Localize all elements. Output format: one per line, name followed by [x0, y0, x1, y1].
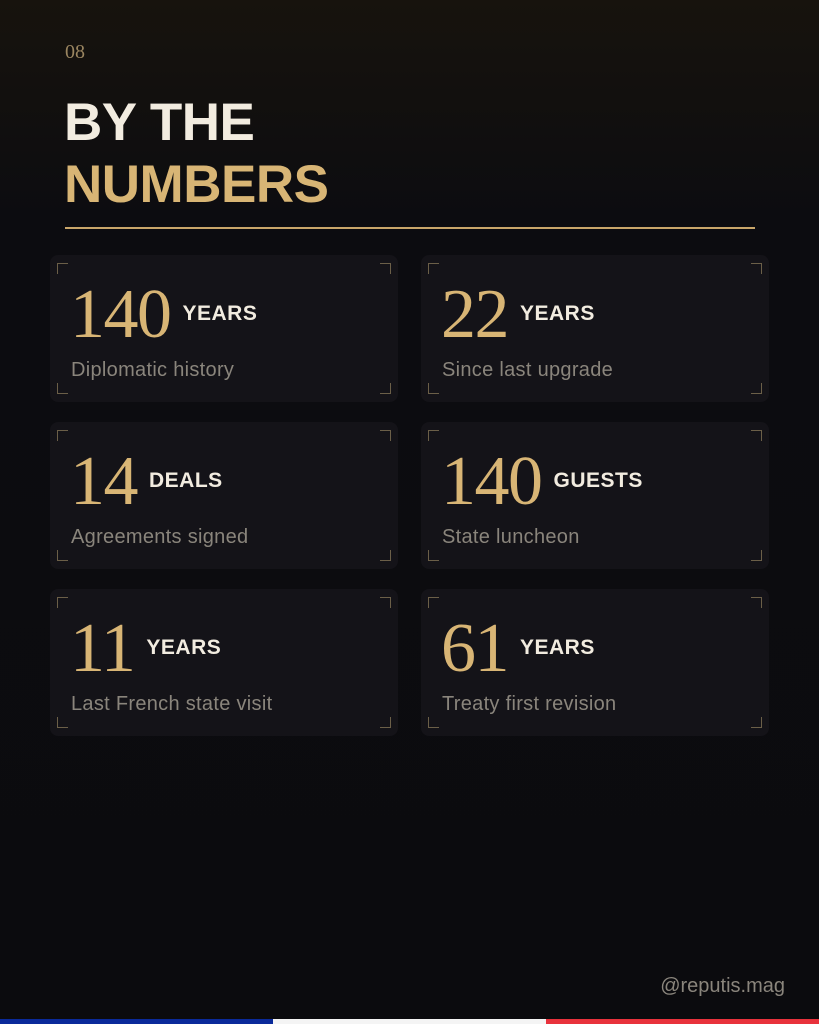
- flag bar: [0, 1019, 819, 1024]
- card: 140 years: Diplomatic history: [71, 359, 234, 381]
- card: 22 years: [421, 255, 769, 402]
- card: 140 guests: 140 GUESTS: [441, 443, 643, 520]
- card: 61 years: Treaty first revision: [442, 693, 616, 715]
- card: 14 deals: [50, 422, 398, 569]
- card: 61 years: 61 YEARS: [441, 610, 595, 687]
- card: 11 years: 11 YEARS: [70, 610, 221, 687]
- card: 140 guests: State luncheon: [442, 526, 580, 548]
- title: BY THE: [64, 93, 254, 152]
- title: [64, 93, 328, 214]
- card: 140 guests: [421, 422, 769, 569]
- card: 14 deals: Agreements signed: [71, 526, 248, 548]
- card: 11 years: Last French state visit: [71, 693, 272, 715]
- card: 14 deals: 14 DEALS: [70, 443, 223, 520]
- card: 22 years: Since last upgrade: [442, 359, 613, 381]
- handle: @reputis.mag: [660, 975, 785, 997]
- title underline: [65, 227, 755, 229]
- card: 11 years: [50, 589, 398, 736]
- card: 140 years: [50, 255, 398, 402]
- page number: 08: [65, 41, 85, 63]
- card: 140 years: 140 YEARS: [70, 276, 257, 353]
- title: NUMBERS: [64, 155, 328, 214]
- card: 22 years: 22 YEARS: [441, 276, 595, 353]
- card: 61 years: [421, 589, 769, 736]
